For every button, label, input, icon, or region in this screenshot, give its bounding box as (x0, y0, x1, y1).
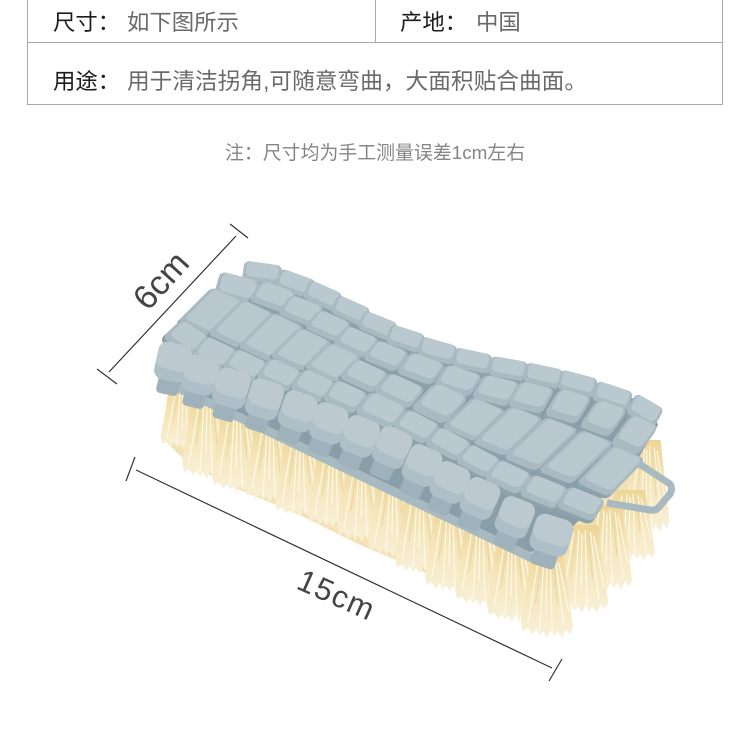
spec table (27, 0, 723, 105)
measurement note: 注：尺寸均为手工测量误差1cm左右 (225, 143, 525, 164)
front row caps (150, 340, 576, 573)
dimension: length 15cm: 15cm (292, 562, 381, 628)
second row caps (213, 271, 659, 461)
back row caps (242, 261, 664, 432)
usage row: 用于清洁拐角,可随意弯曲，大面积贴合曲面。 (127, 68, 587, 94)
usage row: 用途： (53, 69, 120, 94)
fourth row caps (159, 319, 606, 525)
dimension: width 6cm: 6cm (126, 244, 197, 317)
origin row: 产地： (400, 10, 467, 35)
hanging loop (607, 463, 672, 510)
large middle row caps (174, 287, 646, 500)
front lip strip (170, 384, 536, 560)
origin row: 中国 (476, 10, 521, 35)
scrubbing pad caps (150, 261, 664, 573)
dimension: length 15cm (126, 457, 562, 681)
brush base plate (166, 272, 658, 552)
bristles (160, 385, 670, 638)
origin row (400, 10, 521, 35)
size row: 尺寸： (53, 10, 120, 35)
dimension: width 6cm (97, 224, 248, 384)
size row (53, 10, 239, 35)
size row: 如下图所示 (127, 10, 239, 35)
